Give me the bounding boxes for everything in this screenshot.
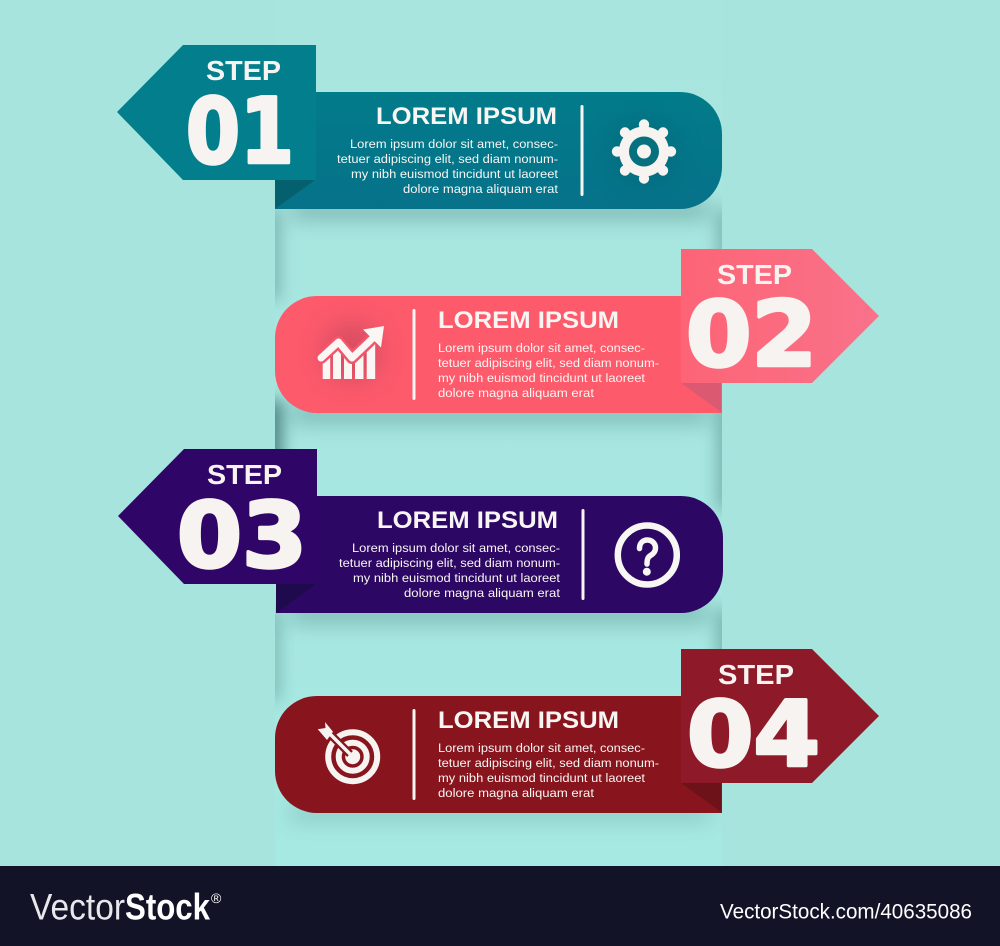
step 3 body text: dolore magna aliquam erat xyxy=(404,586,561,600)
step 3 body text: my nibh euismod tincidunt ut laoreet xyxy=(353,571,561,585)
footer logo: Vector xyxy=(30,886,125,928)
step 3 heading: LOREM IPSUM xyxy=(377,507,558,534)
step 4 body text: dolore magna aliquam erat xyxy=(438,786,595,800)
step 1 band xyxy=(275,92,722,209)
icon: growth chart xyxy=(321,322,384,382)
step 3 arrow tag xyxy=(118,449,317,584)
step 4 body text: tetuer adipiscing elit, sed diam nonum- xyxy=(438,756,659,770)
step 4 arrow tag xyxy=(681,649,879,783)
footer bar: Stock xyxy=(125,886,210,928)
step 4 body text: Lorem ipsum dolor sit amet, consec- xyxy=(438,741,645,755)
step 4 label: STEP xyxy=(718,659,794,690)
step 1 body text: tetuer adipiscing elit, sed diam nonum- xyxy=(337,152,558,166)
step 2 body text: dolore magna aliquam erat xyxy=(438,386,595,400)
step 3 fold xyxy=(276,584,316,613)
step 3 body text: tetuer adipiscing elit, sed diam nonum- xyxy=(339,556,560,570)
step 2 body text: my nibh euismod tincidunt ut laoreet xyxy=(438,371,646,385)
step 3 body text: Lorem ipsum dolor sit amet, consec- xyxy=(352,541,560,555)
footer bar: ® xyxy=(211,890,222,906)
step 1 body text: Lorem ipsum dolor sit amet, consec- xyxy=(350,137,558,151)
step 4 number: 04 xyxy=(687,682,820,788)
central column xyxy=(275,197,722,828)
step 2 body text: tetuer adipiscing elit, sed diam nonum- xyxy=(438,356,659,370)
step 3 band xyxy=(276,496,723,613)
step 3 label: STEP xyxy=(207,459,282,490)
step 2 band xyxy=(275,296,722,413)
step 1 panel xyxy=(117,45,722,209)
step 3 panel xyxy=(118,449,723,613)
step 2 body text xyxy=(438,341,659,400)
step 1 body text: my nibh euismod tincidunt ut laoreet xyxy=(351,167,559,181)
step 2 body text: Lorem ipsum dolor sit amet, consec- xyxy=(438,341,645,355)
step 3 number: 03 xyxy=(177,484,307,588)
step 3 body text xyxy=(339,541,561,600)
step 2 number: 02 xyxy=(686,282,817,388)
footer image id: VectorStock.com/40635086 xyxy=(720,900,972,924)
step 1 fold xyxy=(275,180,315,209)
step 2 heading: LOREM IPSUM xyxy=(438,307,619,334)
step 1 number: 01 xyxy=(186,80,294,184)
step 2 panel xyxy=(275,249,879,413)
step 4 band xyxy=(275,696,722,813)
step 2 fold xyxy=(681,383,721,412)
step 4 heading: LOREM IPSUM xyxy=(438,707,619,734)
icon: target xyxy=(318,722,377,781)
icon: gear xyxy=(610,118,678,186)
icon: question mark xyxy=(618,526,677,584)
step 1 heading: LOREM IPSUM xyxy=(376,103,557,130)
step 4 body text xyxy=(438,741,659,800)
step 1 body text xyxy=(337,137,559,196)
step 1 arrow tag xyxy=(117,45,316,180)
step 2 arrow tag xyxy=(681,249,879,383)
step 1 label: STEP xyxy=(206,55,281,86)
step 4 panel xyxy=(275,649,879,813)
step 4 fold xyxy=(681,783,721,812)
footer bar xyxy=(0,866,1000,946)
step 1 body text: dolore magna aliquam erat xyxy=(403,182,559,196)
step 4 body text: my nibh euismod tincidunt ut laoreet xyxy=(438,771,646,785)
step 2 label: STEP xyxy=(717,259,792,290)
